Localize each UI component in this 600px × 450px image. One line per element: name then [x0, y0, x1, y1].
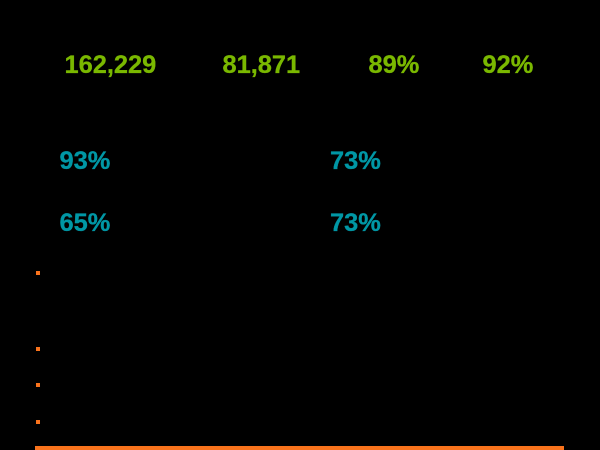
bullet 2: [36, 347, 40, 351]
stat: 73% lower: 73%: [330, 209, 381, 237]
stat: 65%: 65%: [60, 209, 110, 237]
bullet 3: [36, 383, 40, 387]
stat: 162,229: 162,229: [64, 51, 156, 79]
bullet 1: [36, 271, 40, 275]
orange footer bar: [35, 446, 564, 450]
bullet 4: [36, 420, 40, 424]
stat: 92%: 92%: [482, 51, 533, 79]
stat: 93%: 93%: [60, 147, 110, 175]
stat: 89%: 89%: [368, 51, 419, 79]
stat: 73% upper: 73%: [330, 147, 381, 175]
stat: 81,871: 81,871: [222, 51, 300, 79]
